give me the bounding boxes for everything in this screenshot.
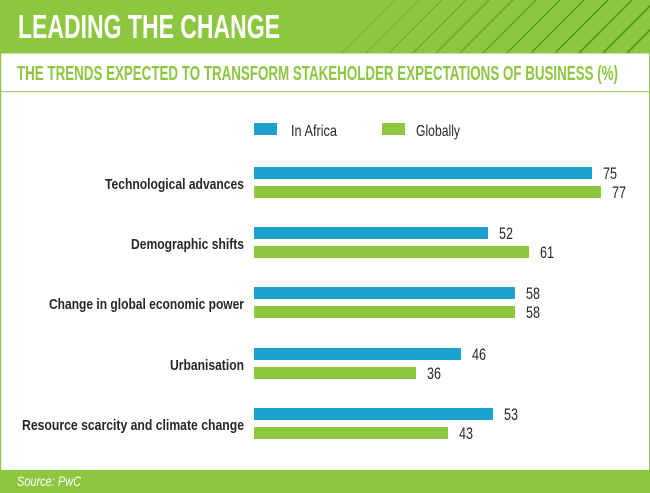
bar chart bbox=[22, 165, 626, 443]
legend: Globally bbox=[382, 123, 460, 140]
row: Technological advances: 75 bbox=[603, 165, 617, 183]
row: Technological advances: Technological advances bbox=[105, 176, 244, 193]
row: Change in global economic power bbox=[49, 285, 540, 322]
row: Demographic shifts bbox=[131, 225, 554, 262]
legend: Globally: Globally bbox=[416, 123, 460, 140]
footer band bbox=[0, 470, 650, 493]
row: Urbanisation: 46 bbox=[472, 346, 486, 364]
row: Demographic shifts: Demographic shifts bbox=[131, 236, 244, 253]
row: Demographic shifts: 61 bbox=[540, 244, 554, 262]
header band bbox=[0, 0, 650, 53]
row: Urbanisation bbox=[170, 346, 486, 383]
row: Resource scarcity and climate change bbox=[22, 406, 518, 443]
subtitle panel bbox=[0, 53, 650, 92]
row: Change in global economic power: Change in global economic power bbox=[49, 296, 244, 313]
source: Source: PwC bbox=[17, 473, 82, 489]
row: Demographic shifts: 52 bbox=[499, 225, 513, 243]
legend: In Africa bbox=[254, 123, 337, 140]
row: Resource scarcity and climate change: 53 bbox=[504, 406, 518, 424]
row: Technological advances: 77 bbox=[612, 184, 626, 202]
row: Urbanisation: 36 bbox=[427, 365, 441, 383]
row: Technological advances bbox=[105, 165, 626, 202]
row: Change in global economic power: 58 bbox=[526, 304, 540, 322]
legend bbox=[254, 123, 460, 140]
row: Urbanisation: Urbanisation bbox=[170, 357, 244, 374]
row: Resource scarcity and climate change: 43 bbox=[459, 425, 473, 443]
title: LEADING THE CHANGE bbox=[18, 8, 280, 45]
row: Change in global economic power: 58 bbox=[526, 285, 540, 303]
row: Resource scarcity and climate change: Resource scarcity and climate change bbox=[22, 417, 244, 434]
legend: In Africa: In Africa bbox=[291, 123, 337, 140]
